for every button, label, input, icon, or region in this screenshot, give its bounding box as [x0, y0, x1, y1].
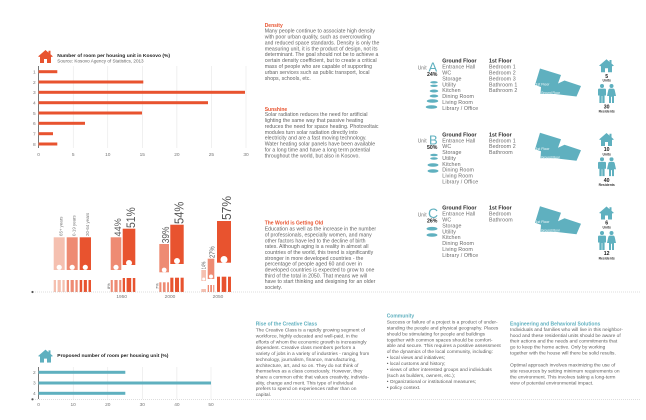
- text: The World is Getting Old: stronger in more developed countries - the: [265, 256, 363, 262]
- unit A units and residents: 30: [604, 104, 610, 110]
- text: Community: • local customs and history;: [387, 361, 445, 367]
- unit A ground floor list: WC: [442, 70, 451, 76]
- percentage labels: 7%: [154, 283, 160, 289]
- unit A ground floor list: Storage: [442, 76, 462, 82]
- chart: number of rooms per housing unit in Kosovo: [33, 50, 249, 158]
- unit B label: [418, 132, 438, 151]
- axis with year labels: 2050: [213, 294, 224, 300]
- text: Community: standing the people and physical geography. Places: [387, 325, 499, 331]
- unit B ground floor list: Utility: [442, 156, 456, 162]
- text: Community: Success or failure of a project is a product of under-: [387, 319, 498, 325]
- unit A ground floor list: [442, 59, 478, 112]
- legend labels: [58, 212, 90, 236]
- axis labels: 0: [37, 152, 40, 158]
- bars: [39, 371, 211, 395]
- unit C first floor list: [489, 206, 513, 224]
- row labels: [33, 370, 36, 397]
- text: The World is Getting Old: countries of the world, this trend is significantly: [265, 250, 374, 256]
- unit A units and residents: Residents: [599, 110, 615, 114]
- unit A ground floor list: Dining Room: [442, 94, 475, 100]
- text: Community: • Organizational or institutional measures;: [387, 379, 476, 385]
- unit A first floor list: Bathroom 2: [489, 88, 517, 94]
- unit C label: [418, 205, 438, 224]
- icon: teal house: [38, 350, 53, 363]
- unit B ground floor list: Living Room: [442, 174, 473, 180]
- legend labels: 65+ years: [58, 216, 63, 236]
- chart source: Source: Kosovo Agency of Statistics, 2013: [57, 58, 144, 63]
- text: Density: measuring unit, it is the product of design, not its: [265, 46, 378, 52]
- unit A ground floor list: Library / Office: [442, 106, 478, 112]
- chart: population by age group, 1950 to 2050: [31, 196, 640, 300]
- unit C plan: 1st Floor: [536, 220, 550, 224]
- unit A label: Unit: [418, 65, 427, 71]
- axis labels: 40: [174, 402, 180, 408]
- text: Community: [387, 314, 501, 391]
- unit C ground floor list: Library / Office: [442, 253, 478, 259]
- text: Engineering and Behavioral Solutions: site resources by setting minimum requirements on: [510, 369, 620, 375]
- unit B units and residents: Residents: [599, 183, 615, 187]
- unit B first floor list: Bathroom: [489, 150, 513, 156]
- text: Community: able and secure. This requires a positive assessment: [387, 343, 501, 349]
- unit B ground floor list: Dining Room: [442, 168, 475, 174]
- unit C ground floor list: Entrance Hall: [442, 212, 475, 218]
- percentage labels: 44%: [113, 218, 124, 236]
- unit A ground floor list: Kitchen: [442, 88, 461, 94]
- percentage labels: 57%: [219, 196, 234, 220]
- unit A units and residents: [598, 59, 616, 114]
- chart title: Proposed number of room per housing unit (%): [57, 353, 169, 359]
- unit A label: [418, 60, 438, 78]
- text: The World is Getting Old: [265, 220, 376, 291]
- unit B units and residents: 10: [604, 147, 610, 153]
- text: Sunshine: throughout the world, but also in Kosovo.: [265, 153, 360, 159]
- text: The World is Getting Old: society.: [265, 285, 282, 291]
- unit C markers: [426, 227, 438, 237]
- text: Community: • policy context.: [387, 385, 420, 391]
- unit B ground floor list: Entrance Hall: [442, 138, 475, 144]
- row labels: 8: [33, 142, 36, 148]
- unit B ground floor list: [442, 132, 478, 186]
- row labels: 5: [33, 111, 36, 117]
- percentage labels: 51%: [126, 207, 138, 228]
- row labels: 3: [33, 90, 36, 96]
- axis labels: 30: [243, 152, 249, 158]
- axis with year labels: 2000: [165, 294, 176, 300]
- unit A first floor list: [489, 59, 517, 94]
- text: Density: shops, schools, etc.: [265, 76, 311, 82]
- text: Rise of the Creative Class: technology, journalism, finance, manufacturing,: [256, 357, 357, 363]
- row labels: 2: [33, 80, 36, 86]
- unit C ground floor list: Living Room: [442, 247, 473, 253]
- unit A plan: 1st Floor: [536, 82, 550, 86]
- text: Sunshine: reduces the need for space heating. Photovoltaic: [265, 124, 379, 130]
- unit A first floor list: Bathroom 1: [489, 82, 517, 88]
- unit A ground floor list: Utility: [442, 82, 456, 88]
- unit C first floor list: Bathroom: [489, 218, 513, 224]
- unit A ground floor list: Entrance Hall: [442, 65, 475, 71]
- axis labels: 15: [140, 152, 145, 158]
- text: Rise of the Creative Class: Rise of the Creative Class: [256, 322, 317, 328]
- text: Rise of the Creative Class: themselves as a class consciously. However, they: [256, 369, 363, 375]
- axis labels: 10: [105, 152, 111, 158]
- axis labels: 30: [140, 402, 145, 408]
- text: Rise of the Creative Class: dependent. Creative class members perform a: [256, 345, 356, 351]
- row labels: 6: [33, 121, 36, 127]
- text: The World is Getting Old: other factors have led to the decline of birth: [265, 238, 366, 244]
- text: Rise of the Creative Class: prefers to spend on experiences rather than on: [256, 386, 357, 392]
- bars: [39, 70, 245, 146]
- unit C units and residents: [598, 206, 616, 261]
- unit C units and residents: Residents: [599, 257, 615, 261]
- row labels: [33, 70, 36, 148]
- text: Rise of the Creative Class: share a common ethic that values creativity, individu-: [256, 374, 369, 380]
- unit B ground floor list: WC: [442, 144, 451, 150]
- unit A units and residents: 5: [605, 74, 608, 80]
- text: The World is Getting Old: percentage of people aged 60 and over in: [265, 262, 362, 268]
- unit A ground floor list: Ground Floor: [442, 59, 477, 65]
- text: Sunshine: for a long time and have a long term potential: [265, 147, 370, 153]
- row labels: 3: [33, 381, 36, 387]
- text: Density: with poor urban quality, such as overcrowding: [265, 34, 371, 40]
- unit C ground floor list: Kitchen: [442, 235, 461, 241]
- row labels: 1: [33, 70, 36, 76]
- text: Engineering and Behavioral Solutions: view of potential environmental impact.: [510, 380, 593, 386]
- text: Sunshine: Water heating solar panels have been available: [265, 142, 375, 148]
- percentage labels: 8%: [106, 283, 111, 289]
- text: Density: Many people continue to associate high density: [265, 28, 375, 34]
- text: The World is Getting Old: Education as well as the increase in the number: [265, 227, 376, 233]
- icon: orange house: [38, 50, 53, 63]
- text: Density: and reduced space standards. Density is only the: [265, 40, 379, 46]
- text: Engineering and Behavioral Solutions: Optimal approach involves maximizing the use of: [510, 363, 616, 369]
- text: Density: mass of people who are capable of supporting: [265, 64, 372, 70]
- text: Density: Density: [265, 23, 283, 29]
- unit C units and residents: 12: [604, 251, 610, 257]
- unit B units and residents: [598, 133, 616, 187]
- unit B label: Unit: [418, 138, 427, 144]
- unit B row: [418, 132, 616, 187]
- text: Rise of the Creative Class: capital.: [256, 392, 271, 398]
- unit C units and residents: Units: [602, 226, 611, 230]
- unit A row: [418, 59, 616, 114]
- text: Sunshine: electricity and are a fast moving technology.: [265, 136, 367, 142]
- text: Sunshine: Solar radiation reduces the need for artificial: [265, 112, 368, 118]
- unit B ground floor list: Kitchen: [442, 162, 461, 168]
- unit C label: Unit: [418, 213, 427, 219]
- axis labels: 20: [105, 402, 111, 408]
- row labels: 2: [33, 370, 36, 376]
- unit A units and residents: Units: [602, 79, 611, 83]
- text: Engineering and Behavioral Solutions: together with the house will there be solid results.: [510, 350, 616, 356]
- baseline: [31, 398, 640, 400]
- unit B units and residents: Units: [602, 152, 611, 156]
- percentage labels: 14%: [202, 261, 208, 269]
- text: Density: [265, 23, 379, 82]
- unit A markers: [426, 81, 438, 109]
- unit A plan: Ground Floor: [541, 91, 561, 95]
- axis with year labels: 1950: [116, 294, 127, 300]
- unit B first floor list: [489, 132, 516, 156]
- text: Sunshine: Sunshine: [265, 107, 287, 113]
- percentage labels: [106, 196, 234, 289]
- unit A label: A: [428, 60, 438, 74]
- legend bars: [53, 237, 92, 292]
- chart title: Number of room per housing unit in Kosovo (%): [57, 53, 170, 59]
- axis labels: 25: [209, 152, 214, 158]
- axis labels: 0: [37, 402, 40, 408]
- text: Engineering and Behavioral Solutions: the environment. This involves taking a long-term: [510, 374, 615, 380]
- text: Rise of the Creative Class: ality, change and merit. This type of individual: [256, 380, 353, 386]
- text: Rise of the Creative Class: efforts of whom the economic growth is increasingly: [256, 339, 367, 345]
- unit C label: C: [428, 205, 438, 221]
- text: Density: urban services such as public transport, local: [265, 70, 370, 76]
- unit B markers: [428, 154, 438, 173]
- legend labels: 20-64 years: [85, 212, 90, 236]
- text: The World is Getting Old: of professionals, especially women, and many: [265, 232, 372, 238]
- unit B ground floor list: Storage: [442, 150, 462, 156]
- unit C ground floor list: Storage: [442, 223, 462, 229]
- unit B label: 50%: [427, 145, 438, 151]
- unit A first floor list: Bedroom 1: [489, 65, 516, 71]
- unit C ground floor list: [442, 206, 478, 259]
- axis labels: [37, 152, 249, 158]
- text: Engineering and Behavioral Solutions: [510, 321, 623, 386]
- unit C first floor list: 1st Floor: [489, 206, 512, 212]
- unit B first floor list: 1st Floor: [489, 132, 512, 138]
- unit A first floor list: Bedroom 2: [489, 70, 516, 76]
- unit B plan: 1st Floor: [536, 147, 550, 151]
- unit C first floor list: Bedroom: [489, 212, 512, 218]
- axis labels: [37, 402, 214, 408]
- text: The World is Getting Old: rates. Although aging is a reality in almost all: [265, 244, 369, 250]
- unit B first floor list: Bedroom 1: [489, 138, 516, 144]
- unit B plan: [535, 133, 581, 161]
- unit C row: [418, 205, 616, 261]
- text: The World is Getting Old: have to start thinking and designing for an older: [265, 279, 376, 285]
- unit C plan: [535, 206, 581, 234]
- unit A label: 24%: [427, 72, 438, 78]
- unit B plan: Ground Floor: [541, 155, 561, 159]
- text: Community: • local views and initiatives;: [387, 355, 445, 361]
- unit C ground floor list: Dining Room: [442, 241, 475, 247]
- bars 2050: [201, 221, 232, 292]
- unit C ground floor list: Utility: [442, 229, 456, 235]
- row labels: 4: [33, 391, 36, 397]
- bars 2000: [159, 225, 185, 292]
- text: The World is Getting Old: third of the total in 2050. That means we will: [265, 273, 367, 279]
- text: The World is Getting Old: The World is Getting Old: [265, 220, 323, 226]
- text: Community: • views of other interested groups and individuals: [387, 367, 492, 373]
- text: Engineering and Behavioral Solutions: their actions and the needs and commitments that: [510, 339, 618, 345]
- bars 1950: [110, 229, 136, 292]
- axis labels: 5: [72, 152, 75, 158]
- unit C units and residents: 6: [605, 220, 608, 226]
- row labels: 7: [33, 132, 36, 138]
- percentage labels: 39%: [161, 227, 172, 243]
- text: Community: (such as builders, owners, etc.);: [387, 373, 455, 379]
- text: Engineering and Behavioral Solutions: hood and these residential units should be aware of: [510, 333, 621, 339]
- unit A first floor list: 1st Floor: [489, 59, 512, 65]
- text: Rise of the Creative Class: The Creative Class is a rapidly growing segment of: [256, 328, 366, 334]
- unit C ground floor list: WC: [442, 218, 451, 224]
- axis with year labels: [31, 291, 640, 300]
- unit C ground floor list: Ground Floor: [442, 206, 477, 212]
- unit B ground floor list: Ground Floor: [442, 132, 477, 138]
- text: Community: of the dynamics of the local community, including:: [387, 349, 493, 355]
- text: Engineering and Behavioral Solutions: Engineering and Behavioral Solutions: [510, 321, 601, 327]
- text: Sunshine: lighting the same way that passive heating: [265, 118, 363, 124]
- unit A ground floor list: Living Room: [442, 100, 473, 106]
- unit C label: 26%: [427, 218, 438, 224]
- unit A first floor list: Bedroom 3: [489, 76, 516, 82]
- unit B first floor list: Bedroom 2: [489, 144, 516, 150]
- text: Engineering and Behavioral Solutions: Individuals and families who will live in this neighbor-: [510, 327, 623, 333]
- axis labels: 20: [174, 152, 180, 158]
- unit B ground floor list: Library / Office: [442, 180, 478, 186]
- unit B label: B: [429, 132, 438, 148]
- text: Rise of the Creative Class: [256, 322, 369, 398]
- row labels: 4: [33, 100, 36, 106]
- percentage labels: 54%: [171, 201, 186, 224]
- text: Community: Community: [387, 314, 414, 320]
- text: Community: together with common spaces should be comfort-: [387, 337, 493, 343]
- unit B units and residents: 40: [604, 178, 610, 184]
- text: Sunshine: [265, 107, 379, 159]
- axis labels: 50: [208, 402, 214, 408]
- text: Engineering and Behavioral Solutions: go to keep the home active. Only by working: [510, 344, 606, 350]
- unit A plan: [535, 68, 581, 96]
- text: The World is Getting Old: developed countries is expected to grow to one: [265, 268, 375, 274]
- chart: proposed number of rooms per housing unit: [31, 350, 640, 408]
- text: Density: certain density coefficient, but to create a critical: [265, 58, 377, 64]
- text: Rise of the Creative Class: architecture, art, and so on. They do not think of: [256, 363, 359, 369]
- text: Rise of the Creative Class: workforce, highly educated and well-paid, in the: [256, 334, 358, 340]
- text: Community: should be stimulating for people and buildings: [387, 331, 486, 337]
- percentage labels: 27%: [209, 246, 216, 258]
- legend labels: 0-19 years: [72, 214, 76, 236]
- axis labels: 10: [71, 402, 76, 408]
- text: Density: determinant. The goal should not be to achieve a: [265, 52, 379, 58]
- text: Sunshine: modules turn solar radiation directly into: [265, 130, 358, 136]
- text: Rise of the Creative Class: variety of jobs in a variety of industries - ranging from: [256, 351, 369, 357]
- unit C plan: Ground Floor: [541, 229, 561, 233]
